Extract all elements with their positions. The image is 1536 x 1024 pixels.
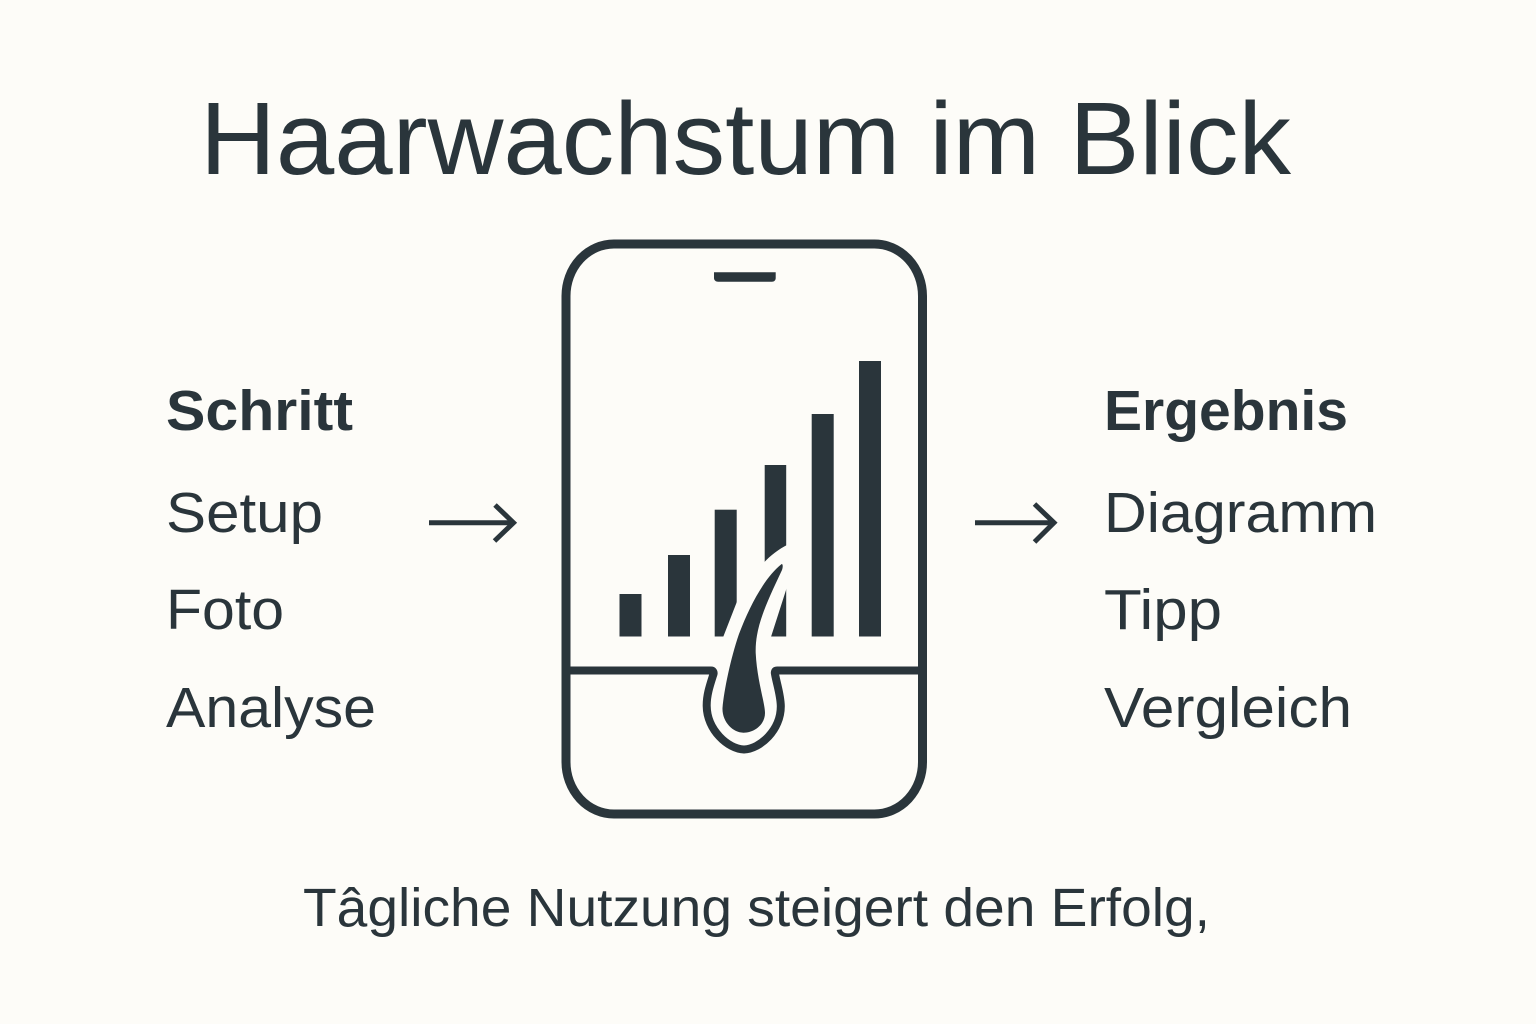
footer caption: Tâgliche Nutzung steigert den Erfolg, (303, 878, 1210, 938)
scalp line and follicle (566, 670, 922, 750)
hair strand (722, 564, 783, 733)
list item: Foto: Foto (166, 578, 284, 642)
list item: Diagramm: Diagramm (1104, 481, 1377, 545)
bar chart (620, 361, 881, 636)
list item: Setup: Setup (166, 481, 323, 545)
panel: Ergebnis list (1104, 379, 1377, 740)
heading: Schritt: Schritt (166, 379, 353, 443)
list item: Tipp: Tipp (1104, 578, 1222, 642)
title: Haarwachstum im Blick (200, 81, 1291, 196)
icon: phone with growth chart and hair (566, 244, 922, 814)
list item: Analyse: Analyse (166, 676, 376, 740)
panel: Schritt list (166, 379, 376, 740)
arrow: phone to results (975, 504, 1054, 542)
phone speaker (714, 272, 776, 282)
heading: Ergebnis: Ergebnis (1104, 379, 1348, 443)
hair halo (722, 545, 787, 640)
list item: Vergleich: Vergleich (1104, 676, 1352, 740)
arrow: steps to phone (429, 505, 514, 541)
phone outline (566, 244, 922, 814)
